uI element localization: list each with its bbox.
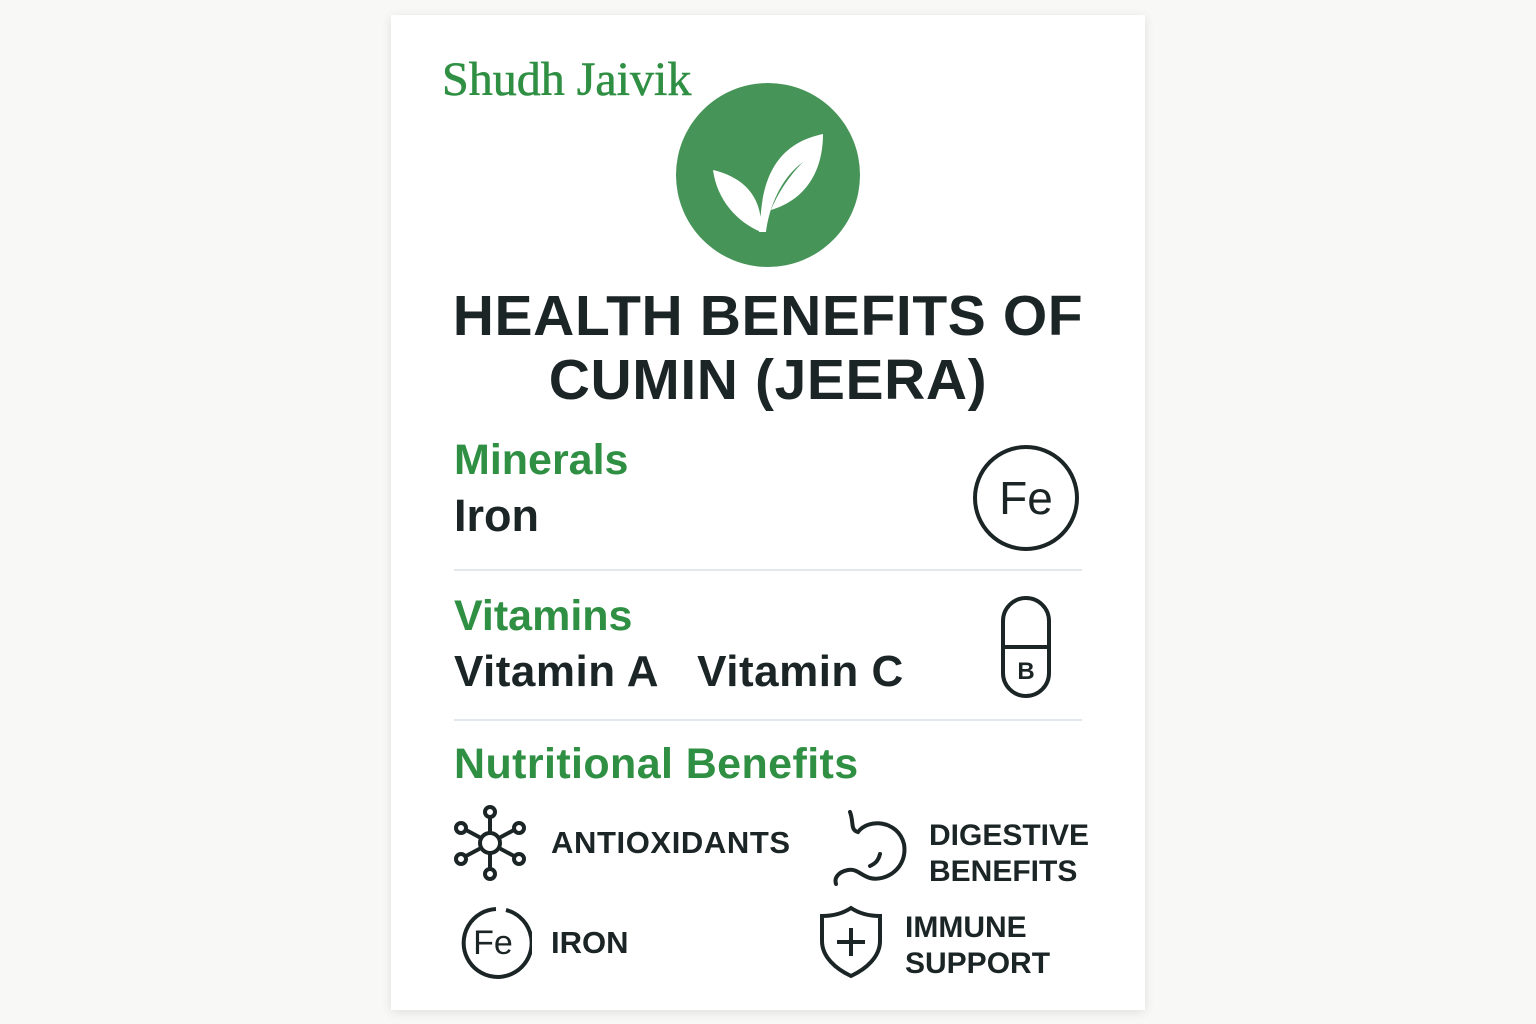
label: digestive benefits: DIGESTIVE <box>929 819 1089 852</box>
benefit: immune support <box>820 906 1050 980</box>
label: immune support <box>905 911 1050 980</box>
icon: Fe ring <box>462 907 532 979</box>
benefit: digestive <box>833 810 1089 888</box>
label: iron: IRON <box>551 925 628 960</box>
icon: leaf logo <box>676 83 860 267</box>
benefit: iron <box>462 907 628 979</box>
section: vitamins <box>454 592 1051 698</box>
label: immune support: IMMUNE <box>905 911 1027 944</box>
icon: Fe ring: Fe <box>473 924 513 962</box>
icon: molecule <box>454 805 526 881</box>
icon: stomach <box>833 810 906 886</box>
heading: minerals: Minerals <box>454 436 628 484</box>
brand name: Shudh Jaivik <box>442 53 691 106</box>
label: digestive benefits: BENEFITS <box>929 855 1077 888</box>
icon: shield <box>820 906 882 978</box>
title: CUMIN (JEERA) <box>549 348 987 412</box>
title <box>453 284 1083 412</box>
icon: Fe circle <box>973 445 1079 551</box>
label: digestive benefits <box>929 819 1089 888</box>
label: immune support: SUPPORT <box>905 947 1050 980</box>
text: vitamin list: Vitamin A Vitamin C <box>454 647 904 696</box>
icon: capsule B: B <box>1017 658 1035 685</box>
card panel <box>391 15 1145 1010</box>
benefit: antioxidants <box>454 805 791 881</box>
heading: vitamins: Vitamins <box>454 592 632 640</box>
icon: capsule B <box>1001 596 1051 698</box>
section: minerals <box>454 436 1079 551</box>
title: HEALTH BENEFITS OF <box>453 284 1083 348</box>
label: antioxidants: ANTIOXIDANTS <box>551 825 791 860</box>
text: iron: Iron <box>454 490 539 541</box>
icon: Fe circle: Fe <box>999 472 1053 524</box>
heading: nutritional benefits: Nutritional Benefits <box>454 740 859 788</box>
